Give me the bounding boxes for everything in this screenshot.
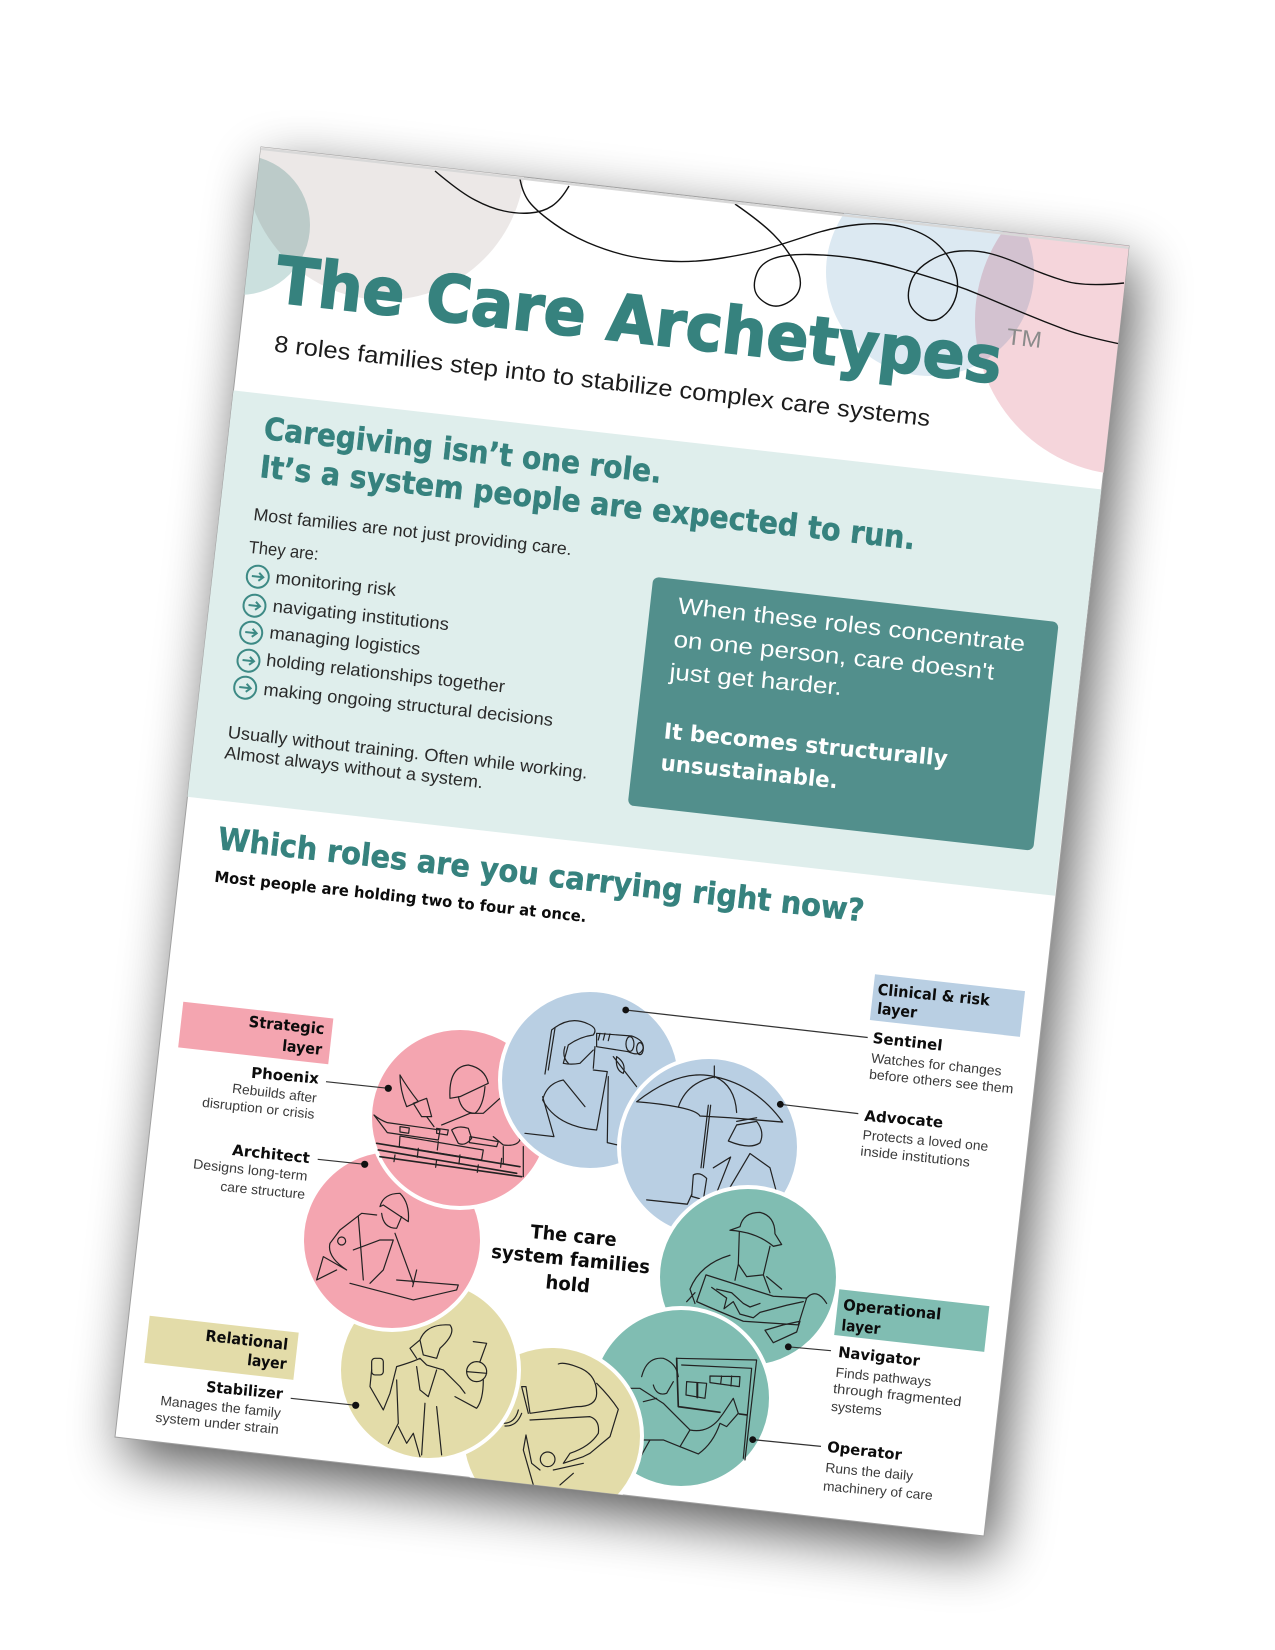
- label: Operational layer: Operational: [842, 1296, 942, 1324]
- role: Phoenix: Phoenix: [250, 1064, 320, 1088]
- role: Architect: Architect: [231, 1141, 311, 1167]
- circle: Stabilizer: [339, 1280, 519, 1460]
- trademark: TM: [1005, 323, 1043, 353]
- poster shadow: [123, 167, 1137, 1556]
- role: Phoenix: [201, 1064, 392, 1122]
- center label: The care: [530, 1221, 618, 1251]
- icon: arrow bullet: [236, 649, 261, 673]
- role: Navigator: systems: [830, 1399, 883, 1418]
- decorative looping lines: [435, 171, 1130, 346]
- text block: intro: Most families are not just providing care.: [253, 504, 573, 559]
- role: Navigator: through fragmented: [832, 1381, 962, 1409]
- text block: without training: Almost always without a system.: [224, 742, 484, 792]
- heading: caregiving: It’s a system people are expected to run.: [258, 449, 917, 557]
- role: Advocate: inside institutions: [860, 1143, 971, 1170]
- role: Phoenix: Rebuilds after: [231, 1081, 318, 1106]
- text block: without training: Usually without training. Often while working.: [227, 722, 589, 783]
- bullet list: [233, 565, 554, 730]
- role: Stabilizer: Manages the family: [160, 1393, 282, 1421]
- callout: structurally unsustainable: It becomes structurally: [663, 719, 949, 772]
- callout: structurally unsustainable: When these roles concentrate: [677, 592, 1026, 657]
- list item: holding relationships together: [265, 650, 506, 696]
- label: Strategic layer: [178, 1002, 333, 1064]
- role: Advocate: Advocate: [864, 1107, 944, 1132]
- label: Clinical and risk layer: layer: [876, 1000, 918, 1022]
- role: Stabilizer: Stabilizer: [205, 1378, 284, 1403]
- role: Phoenix: disruption or crisis: [201, 1095, 316, 1122]
- icon: arrow bullet: [233, 676, 257, 700]
- top edge highlight: [261, 149, 1129, 248]
- heading: which roles: Which roles are you carrying right now?: [216, 821, 866, 929]
- icon: arrow bullet: [239, 621, 263, 645]
- poster artwork: [188, 147, 1129, 1495]
- label: Relational layer: [144, 1316, 299, 1380]
- list item: monitoring risk: [275, 567, 397, 600]
- role: Navigator: Navigator: [837, 1343, 921, 1370]
- circle: Advocate: [619, 1057, 799, 1237]
- role: Sentinel: before others see them: [868, 1067, 1014, 1096]
- subtitle: 8 roles families step into to stabilize complex care systems: [273, 331, 932, 431]
- circle: Operator: [591, 1308, 771, 1488]
- role: Operator: Operator: [826, 1438, 903, 1464]
- label: Operational layer: [834, 1289, 989, 1352]
- role: Architect: Designs long-term: [192, 1156, 308, 1184]
- callout: structurally unsustainable: on one person, care doesn't: [672, 626, 996, 685]
- circle: Sentinel overlap redraw: [498, 992, 616, 1168]
- circle: Navigator: [658, 1187, 838, 1367]
- list item: making ongoing structural decisions: [263, 679, 554, 730]
- role: Sentinel: Watches for changes: [870, 1051, 1002, 1079]
- center label: system families: [490, 1241, 651, 1279]
- icon: arrow bullet: [246, 565, 270, 589]
- callout: structurally unsustainable: [628, 577, 1059, 851]
- role: Sentinel: [622, 1007, 1014, 1096]
- panel: light teal band: [187, 390, 1101, 896]
- role: Architect: care structure: [220, 1179, 306, 1202]
- role: Stabilizer: system under strain: [155, 1410, 280, 1437]
- circle: Anchor role: [466, 1348, 644, 1495]
- label: Strategic layer: layer: [281, 1037, 323, 1059]
- label: Clinical and risk layer: Clinical & risk: [877, 981, 991, 1010]
- callout: structurally unsustainable: unsustainable.: [659, 751, 839, 794]
- label: Clinical and risk layer: [870, 974, 1025, 1037]
- callout: structurally unsustainable: just get harder.: [667, 658, 843, 700]
- list item: managing logistics: [269, 622, 422, 659]
- center label: [490, 1221, 651, 1298]
- role: Advocate: [777, 1101, 989, 1170]
- role: Operator: Runs the daily: [825, 1460, 914, 1483]
- heading: caregiving: [258, 411, 917, 557]
- role: Operator: [749, 1436, 933, 1503]
- role: Navigator: Finds pathways: [835, 1365, 932, 1389]
- center label: hold: [545, 1271, 591, 1298]
- role: Operator: machinery of care: [822, 1478, 933, 1503]
- role: Stabilizer: [155, 1378, 359, 1437]
- poster sheet: [115, 147, 1129, 1536]
- role: Architect: [192, 1141, 368, 1202]
- role: Sentinel: Sentinel: [872, 1029, 943, 1055]
- subheading: Most people are holding two to four at once.: [214, 868, 587, 926]
- circle: Architect: [302, 1150, 482, 1330]
- circle: Sentinel: [500, 990, 680, 1170]
- label: Strategic layer: Strategic: [248, 1013, 325, 1038]
- role: Navigator: [785, 1343, 962, 1418]
- label: Operational layer: layer: [841, 1316, 881, 1338]
- title: The Care Archetypes: [272, 243, 1006, 399]
- list item: navigating institutions: [272, 596, 450, 634]
- text block: intro: They are:: [248, 537, 320, 564]
- icon: arrow bullet: [242, 594, 267, 618]
- heading: caregiving: Caregiving isn’t one role.: [262, 411, 664, 491]
- role: Advocate: Protects a loved one: [862, 1127, 989, 1154]
- label: Relational layer: layer: [246, 1351, 288, 1373]
- header decorative circles: [170, 20, 1275, 475]
- circle: Phoenix: [370, 1028, 550, 1208]
- label: Relational layer: Relational: [205, 1327, 289, 1354]
